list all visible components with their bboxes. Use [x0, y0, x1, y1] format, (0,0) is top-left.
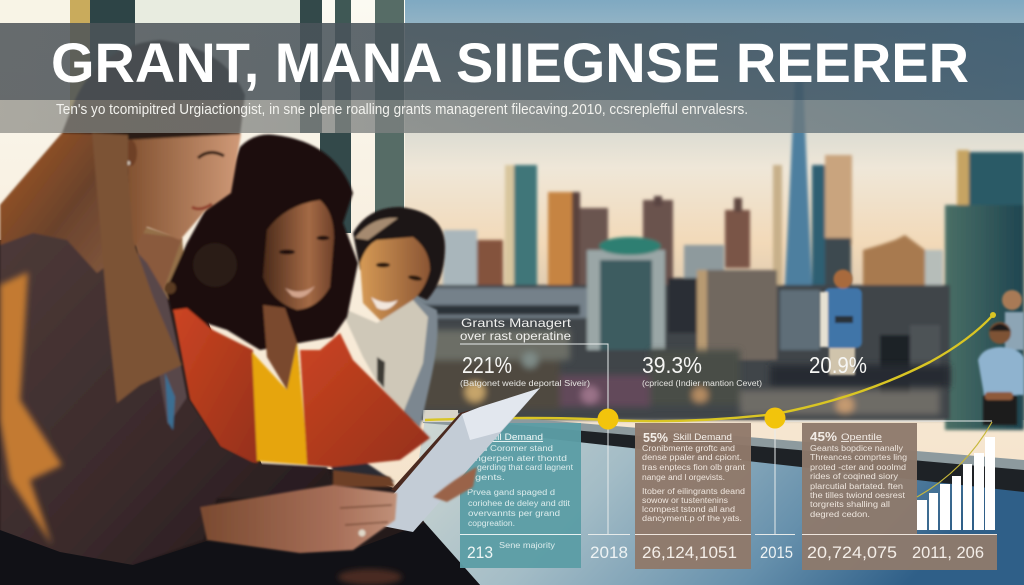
- background: blurred city skyline: [405, 80, 1024, 430]
- panel: skill demand (brown): Skill Demand: [673, 432, 732, 442]
- jacket: [173, 308, 258, 465]
- panel figures: 20,724,075: [807, 544, 897, 562]
- panel body text: d Coromer stand: [482, 444, 553, 453]
- panel body text: degred cedon.: [810, 510, 870, 519]
- chart heading: over rast operatine: [460, 329, 571, 343]
- connector lines: [460, 344, 992, 535]
- panel: skill demand (teal): [460, 423, 581, 568]
- far hand: [433, 467, 477, 502]
- blazer body: [0, 233, 333, 585]
- hair top and back: [0, 40, 245, 403]
- panel body text: rides of coqined siory: [810, 472, 898, 481]
- dark under-layer: [327, 453, 395, 482]
- grey cardigan: [403, 298, 438, 428]
- woman one: foreground, long hair, brown blazer: [0, 40, 395, 585]
- panel: opentile with bar chart: 2011, 206: [912, 544, 984, 562]
- panel body text: copgreation.: [468, 519, 515, 528]
- hands on paper: [200, 467, 477, 553]
- panel figures: 213: [467, 544, 493, 562]
- panel heading: 45%: [810, 430, 837, 444]
- panel body text: torgreits shalling all: [810, 500, 890, 509]
- panel body text: Cronibmente groftc and: [642, 444, 735, 453]
- panel body text: gents.: [475, 473, 505, 482]
- building: spire: [785, 80, 812, 285]
- lapel: [132, 247, 187, 425]
- panel: opentile with bar chart: Opentile: [841, 432, 882, 442]
- paper held by the women: [367, 388, 540, 532]
- forearm skin: [333, 470, 395, 487]
- panel body text: gerding that card lagnent: [477, 463, 574, 472]
- scarf: [340, 300, 428, 413]
- panel body text: overvannts per grand: [468, 509, 560, 518]
- stat: 39.3%: [642, 352, 762, 388]
- blue shirt: [165, 373, 175, 430]
- chart heading: Grants Managert: [461, 316, 572, 330]
- bar chart: [917, 437, 995, 530]
- neck: [263, 305, 297, 390]
- panel body text: sowow or tustentenins: [642, 496, 728, 505]
- face: [360, 237, 430, 323]
- face: [263, 200, 334, 310]
- panel body text: Threances comprtes ling: [810, 453, 907, 462]
- panel body text: lcompest tstond all and: [642, 505, 735, 514]
- background figure: person in blue shirt: [820, 270, 862, 375]
- year labels: [590, 544, 793, 562]
- panel heading: Skill Demand: [483, 432, 543, 443]
- panel body text: [467, 444, 574, 528]
- title: GRANT, MANA SIIEGNSE REERER: [51, 31, 969, 94]
- dark table in foreground: [0, 523, 480, 585]
- stat: 39.3%: 39.3%: [642, 352, 702, 378]
- yellow trend line with markers: [425, 312, 996, 497]
- stat: 221%: (Batgonet weide deportal Siveir): [460, 379, 590, 388]
- stat: 39.3%: (cpriced (Indier mantion Cevet): [642, 379, 762, 388]
- panel body text: dancyment.p of the yats.: [642, 514, 742, 523]
- panel body text: Geants bopdice nanally: [810, 444, 903, 453]
- stat: 221%: [460, 352, 590, 388]
- background figures: two people on right: [978, 290, 1024, 425]
- panel body text: tras enptecs fion olb grant: [642, 463, 746, 472]
- panel body text: coriohee de deley and dtit: [468, 499, 571, 508]
- subtitle band: [0, 100, 1024, 133]
- glass table surface with railing: [400, 410, 1024, 585]
- title banner: [0, 23, 1024, 100]
- white shirt: [132, 270, 145, 300]
- panel body text: Prvea gand spaged d: [467, 488, 555, 497]
- panel body text: the tilles twiond oesrest: [810, 491, 906, 500]
- face: [125, 134, 241, 252]
- year labels: 2018: [590, 544, 628, 562]
- panel body text: Itober of eilingrants deand: [642, 487, 745, 496]
- background: blurred lower city: [420, 330, 950, 415]
- panel body text: [642, 444, 746, 523]
- subtitle: Ten's yo tcomipitred Urgiactiongist, in sne plene roalling grants managerent filecaving.2010, ccsreplefful enrvalesrs.: [56, 101, 748, 118]
- panel body text: dense ppaler and cpiont.: [642, 453, 742, 462]
- panel body text: nange and l orgevists.: [642, 473, 725, 482]
- panel: opentile with bar chart: [802, 423, 997, 570]
- yellow shirt: [252, 343, 307, 465]
- stat: 221%: 221%: [462, 352, 512, 378]
- year labels: 2015: [760, 544, 793, 562]
- hair back, sunlit: [0, 133, 128, 300]
- panel: skill demand (teal): Sene majority: [499, 541, 555, 550]
- lower city band: [405, 285, 950, 420]
- stat: 20.9%: 20.9%: [809, 352, 867, 378]
- woman three: smiling, scarf: [340, 207, 445, 428]
- lit hair edge: [130, 222, 188, 300]
- hair: [166, 134, 358, 350]
- panel body text: proted -cter and ooolmd: [810, 463, 906, 472]
- ring: [358, 530, 366, 536]
- sunlit orange on blazer: [0, 272, 62, 545]
- hair: [353, 207, 445, 300]
- foreground hand: [200, 485, 397, 553]
- panel heading: 55%: [643, 430, 668, 445]
- panel body text: plarcutial bartated. ften: [810, 482, 903, 491]
- dark base behind foreground figures: [0, 225, 480, 585]
- woman two: curly hair, red jacket, yellow shirt: [130, 134, 430, 482]
- neck: [133, 232, 182, 300]
- chart heading: [460, 316, 572, 343]
- panel body text: [810, 444, 907, 519]
- long hair over shoulder: [92, 133, 182, 403]
- panel: skill demand (brown): [635, 423, 751, 569]
- panel body text: ngerpen ater thontd: [475, 454, 567, 463]
- panel figures: 26,124,1051: [642, 544, 737, 562]
